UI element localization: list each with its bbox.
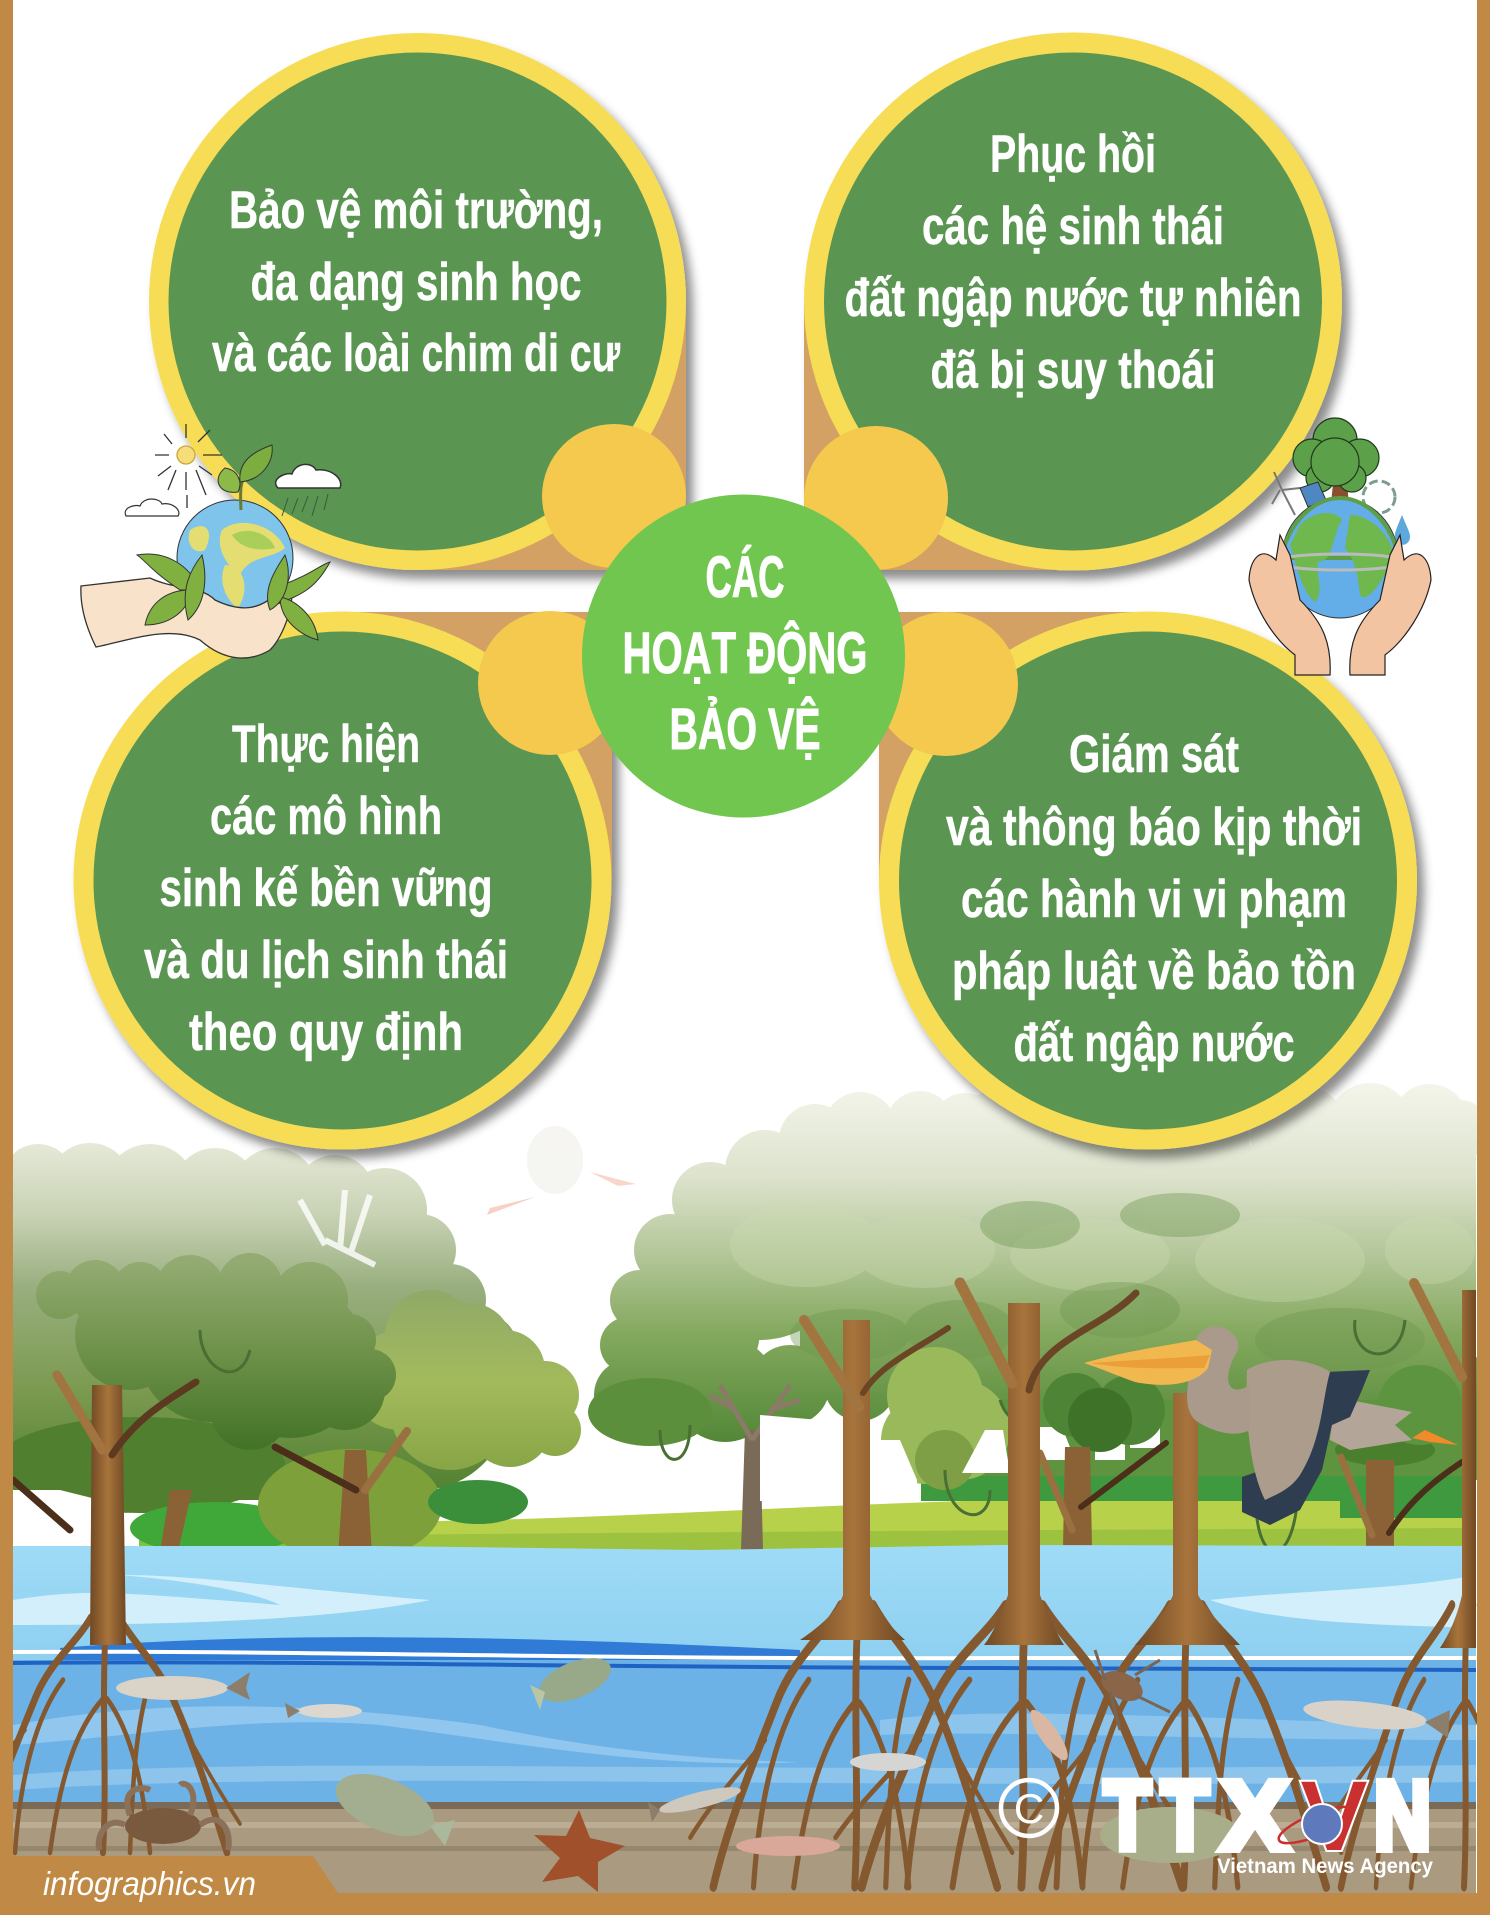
text: monitoring and reporting: các hành vi vi phạm xyxy=(961,870,1347,929)
starfish xyxy=(534,1810,625,1892)
website tab: infographics.vn xyxy=(43,1865,256,1902)
hands xyxy=(1249,535,1431,675)
center title: HOẠT ĐỘNG xyxy=(622,621,868,686)
mid green trees right xyxy=(760,1347,1477,1518)
water drop xyxy=(1395,515,1410,545)
copyright symbol xyxy=(1001,1780,1057,1836)
mangrove trunks foreground xyxy=(90,1290,1476,1648)
panel: livelihood models xyxy=(74,612,612,1150)
globe xyxy=(177,500,293,616)
shrimp xyxy=(736,1836,840,1856)
text: monitoring and reporting xyxy=(946,725,1362,1073)
canopy cloud-like highlights xyxy=(730,1203,1475,1302)
text: environment protection xyxy=(212,181,620,383)
text: environment protection: Bảo vệ môi trường, xyxy=(229,181,603,240)
underwater xyxy=(13,1652,1476,1808)
crabs xyxy=(99,1650,1170,1850)
TTXVN logo xyxy=(1104,1759,1433,1878)
text: environment protection: và các loài chim di cư xyxy=(212,324,620,383)
text: restore ecosystems: đất ngập nước tự nhiên xyxy=(844,269,1302,328)
center title xyxy=(622,545,868,762)
icon: hands holding earth with tree xyxy=(1249,418,1431,675)
mangrove forest scene xyxy=(0,1083,1490,1894)
text: restore ecosystems: đã bị suy thoái xyxy=(930,341,1216,400)
TTXVN logo: X xyxy=(1221,1761,1289,1870)
white cloud with rain xyxy=(276,464,341,516)
text: monitoring and reporting: đất ngập nước xyxy=(1014,1014,1294,1073)
connector circles xyxy=(478,424,1018,756)
background branches xyxy=(13,1431,1462,1535)
panel: environment protection xyxy=(149,33,686,570)
dark foreground canopy xyxy=(36,1253,396,1450)
TTXVN logo: V xyxy=(1299,1759,1369,1873)
faint bare branches xyxy=(300,1190,375,1265)
central small tree xyxy=(588,1378,800,1550)
canopy shadow lobes xyxy=(790,1193,1425,1372)
white gap bottom left xyxy=(13,1490,100,1552)
TTXVN logo: N xyxy=(1374,1761,1431,1870)
text: monitoring and reporting: Giám sát xyxy=(1069,725,1239,784)
hand and arm xyxy=(81,578,292,658)
text: livelihood models xyxy=(144,715,508,1062)
copyright symbol: C xyxy=(1014,1785,1044,1832)
leaves xyxy=(137,554,330,640)
panel: restore ecosystems xyxy=(804,32,1342,570)
center title: CÁC xyxy=(706,545,784,610)
text: environment protection: đa dạng sinh học xyxy=(250,253,582,312)
vines xyxy=(200,1320,1405,1551)
tree xyxy=(1293,418,1379,505)
faint white bird xyxy=(487,1126,636,1215)
text: restore ecosystems: các hệ sinh thái xyxy=(922,197,1224,256)
TTXVN logo: Vietnam News Agency xyxy=(1217,1855,1433,1878)
spotted green fish xyxy=(327,1649,1240,1863)
mangrove roots foreground xyxy=(0,1605,1490,1887)
website tab xyxy=(0,1856,338,1915)
panel: monitoring and reporting xyxy=(879,612,1417,1150)
background trees left xyxy=(2,1143,518,1500)
TTXVN logo: T xyxy=(1161,1761,1209,1870)
text: livelihood models: theo quy định xyxy=(189,1003,463,1062)
center hub xyxy=(582,494,905,818)
text: livelihood models: Thực hiện xyxy=(232,715,420,774)
ground grass xyxy=(139,1500,1476,1552)
text: restore ecosystems xyxy=(844,125,1302,400)
text: monitoring and reporting: pháp luật về bảo tồn xyxy=(952,942,1356,1001)
text: monitoring and reporting: và thông báo kịp thời xyxy=(946,798,1362,857)
text: livelihood models: và du lịch sinh thái xyxy=(144,931,508,990)
background trees right xyxy=(594,1083,1490,1465)
text: livelihood models: các mô hình xyxy=(210,787,442,846)
TTXVN logo: T xyxy=(1104,1761,1151,1870)
outline cloud xyxy=(125,499,179,516)
pelican xyxy=(1084,1326,1458,1525)
icon: hands holding earth with sprout xyxy=(81,424,341,658)
sun and rays xyxy=(155,424,222,508)
mangrove branches foreground xyxy=(57,1283,1462,1455)
recycle symbol xyxy=(1363,481,1395,513)
text: restore ecosystems: Phục hồi xyxy=(990,125,1156,184)
wind turbine and solar panel xyxy=(1272,472,1326,515)
earth xyxy=(1274,498,1406,618)
bright bushes left xyxy=(0,1417,528,1561)
center title: BẢO VỆ xyxy=(670,697,820,762)
silver fish xyxy=(116,1672,1450,1822)
background trunks xyxy=(160,1447,1394,1555)
canopy right of left tree xyxy=(350,1290,581,1470)
river surface xyxy=(13,1545,1476,1664)
sprout xyxy=(218,445,272,510)
text: livelihood models: sinh kế bền vững xyxy=(160,859,492,918)
river bed xyxy=(13,1802,1476,1894)
